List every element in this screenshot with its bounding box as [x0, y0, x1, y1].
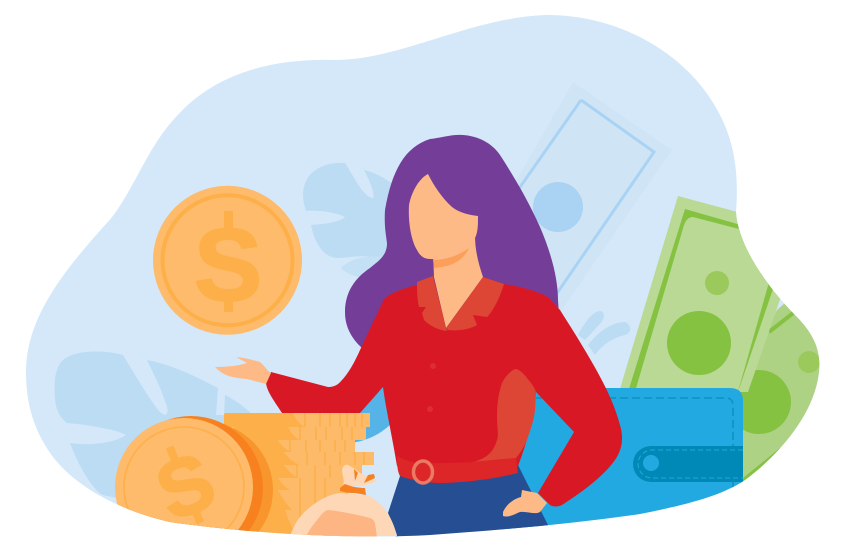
- pale wallet shadow behind arm: [355, 387, 390, 442]
- wallet: [500, 388, 743, 545]
- leaf: upper centre: [303, 163, 392, 278]
- leaf fragments behind arm: [578, 311, 630, 355]
- lower coin: [115, 416, 273, 532]
- leaf: lower left: [54, 352, 250, 498]
- pants: [388, 465, 548, 540]
- dollar sign: S: [144, 435, 227, 538]
- neck: [433, 235, 483, 328]
- dollar sign: S: [194, 208, 262, 322]
- green banknote: back: [740, 304, 820, 484]
- sweater: [266, 276, 622, 506]
- sweater side shade: [473, 369, 536, 462]
- green banknote: front: [620, 196, 780, 392]
- collar left: [417, 276, 447, 331]
- clipped scene: [54, 98, 820, 536]
- dollar sign: [158, 446, 214, 524]
- coin stack: [224, 413, 374, 538]
- hair: [345, 135, 560, 348]
- pale back banknote: [519, 98, 656, 295]
- neck shadow: [433, 248, 469, 268]
- face: [409, 174, 478, 259]
- sweater buttons: [427, 363, 436, 412]
- woman: [215, 135, 622, 540]
- right hand: [503, 490, 547, 517]
- belt: [397, 456, 518, 483]
- collar right: [446, 277, 504, 330]
- money bag: [290, 465, 397, 537]
- left hand: [215, 357, 271, 384]
- belt buckle: [414, 461, 432, 483]
- top coin: [153, 186, 302, 335]
